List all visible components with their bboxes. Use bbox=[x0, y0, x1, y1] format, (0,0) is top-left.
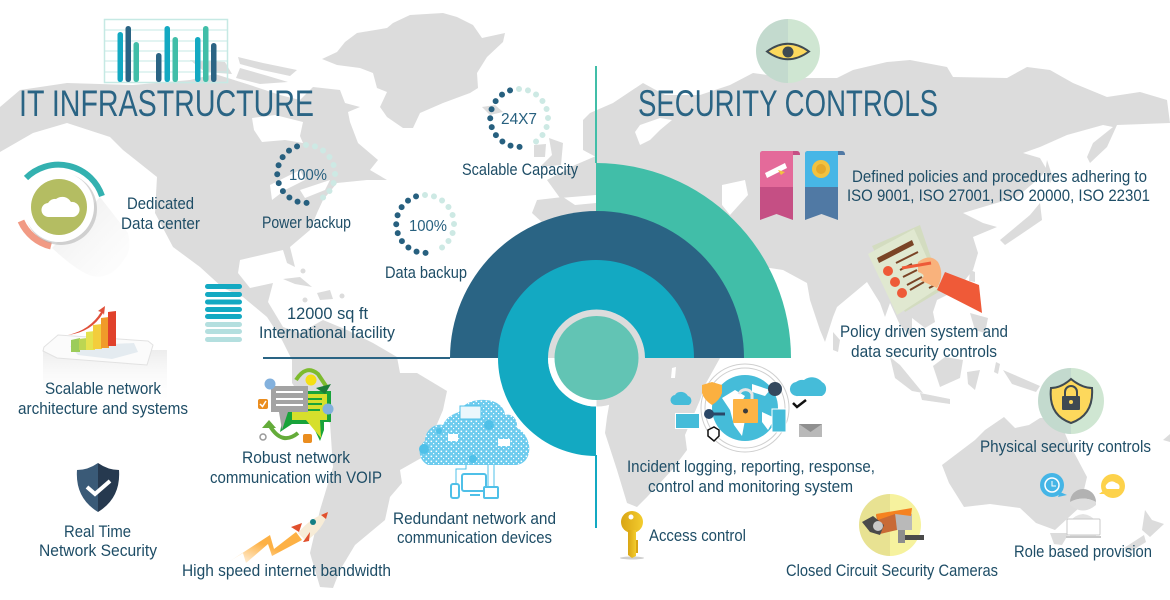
label: real time network security: Network Security bbox=[39, 541, 157, 560]
label: policy driven system: data security controls bbox=[851, 342, 997, 361]
power backup gauge: 100% bbox=[289, 167, 327, 184]
data backup gauge: 100% bbox=[409, 218, 447, 235]
icon: eye bbox=[756, 19, 820, 83]
label: scalable network bbox=[18, 379, 188, 418]
icon: globe and security devices bbox=[670, 364, 826, 452]
heading: Security Controls: SECURITY CONTROLS bbox=[638, 83, 938, 124]
label: dedicated data center: Dedicated bbox=[127, 194, 194, 213]
label: policy driven system: Policy driven system and bbox=[840, 322, 1008, 341]
icon: CCTV camera bbox=[859, 494, 924, 556]
heading: IT Infrastructure: IT INFRASTRUCTURE bbox=[19, 83, 314, 124]
capacity gauge: 24X7 bbox=[501, 111, 537, 128]
icon: padlock shield bbox=[1038, 368, 1104, 434]
label: incident logging: Incident logging, reporting, response, bbox=[627, 457, 875, 476]
icon: shield with tick bbox=[77, 463, 119, 512]
label: data backup: Data backup bbox=[385, 263, 467, 282]
icon: key bbox=[620, 511, 644, 560]
label: redundant network bbox=[393, 509, 556, 547]
label: incident logging bbox=[627, 457, 875, 496]
icon: policy checklist bbox=[868, 225, 982, 315]
label: international facility: 12000 sq ft bbox=[287, 304, 368, 323]
label: VOIP: communication with VOIP bbox=[210, 468, 382, 487]
label: dedicated data center: Data center bbox=[121, 214, 200, 233]
label: scalable network: Scalable network bbox=[45, 379, 161, 398]
icon: VOIP chat bubbles bbox=[258, 370, 334, 443]
label: access control: Access control bbox=[649, 526, 746, 545]
capacity gauge bbox=[490, 89, 548, 147]
label: international facility: International facility bbox=[259, 323, 395, 342]
label: real time network security bbox=[39, 522, 157, 560]
label: role based provision: Role based provision bbox=[1014, 542, 1152, 561]
label: policy driven system bbox=[840, 322, 1008, 361]
label: redundant network: Redundant network and bbox=[393, 509, 556, 528]
label: VOIP: Robust network bbox=[242, 448, 350, 467]
icon: data center cloud bbox=[21, 165, 129, 277]
icon: certificate ribbons bbox=[760, 151, 845, 220]
label: physical security: Physical security controls bbox=[980, 437, 1151, 456]
icon: network cloud and devices bbox=[419, 400, 529, 498]
label: defined policies bbox=[847, 167, 1150, 205]
label: VOIP bbox=[210, 448, 382, 487]
label: scalable capacity: Scalable Capacity bbox=[462, 160, 578, 179]
centre semicircle diagram bbox=[263, 66, 791, 528]
label: international facility bbox=[259, 304, 395, 342]
icon: server stack bbox=[205, 284, 242, 342]
icon: rocket with lightning trail bbox=[227, 512, 328, 563]
label: incident logging: control and monitoring system bbox=[648, 477, 853, 496]
label: power backup: Power backup bbox=[262, 213, 351, 232]
label: real time network security: Real Time bbox=[64, 522, 131, 541]
icon: phone with growth chart bbox=[43, 306, 167, 405]
data backup gauge bbox=[396, 195, 454, 253]
label: scalable network: architecture and systems bbox=[18, 399, 188, 418]
label: CCTV: Closed Circuit Security Cameras bbox=[786, 561, 998, 580]
label: redundant network: communication devices bbox=[397, 528, 552, 547]
label: high speed internet: High speed internet bandwidth bbox=[182, 561, 391, 580]
icon: role provision user bbox=[1040, 473, 1125, 537]
label: dedicated data center bbox=[121, 194, 200, 233]
chart icon bbox=[104, 20, 228, 82]
power backup gauge bbox=[277, 145, 335, 203]
